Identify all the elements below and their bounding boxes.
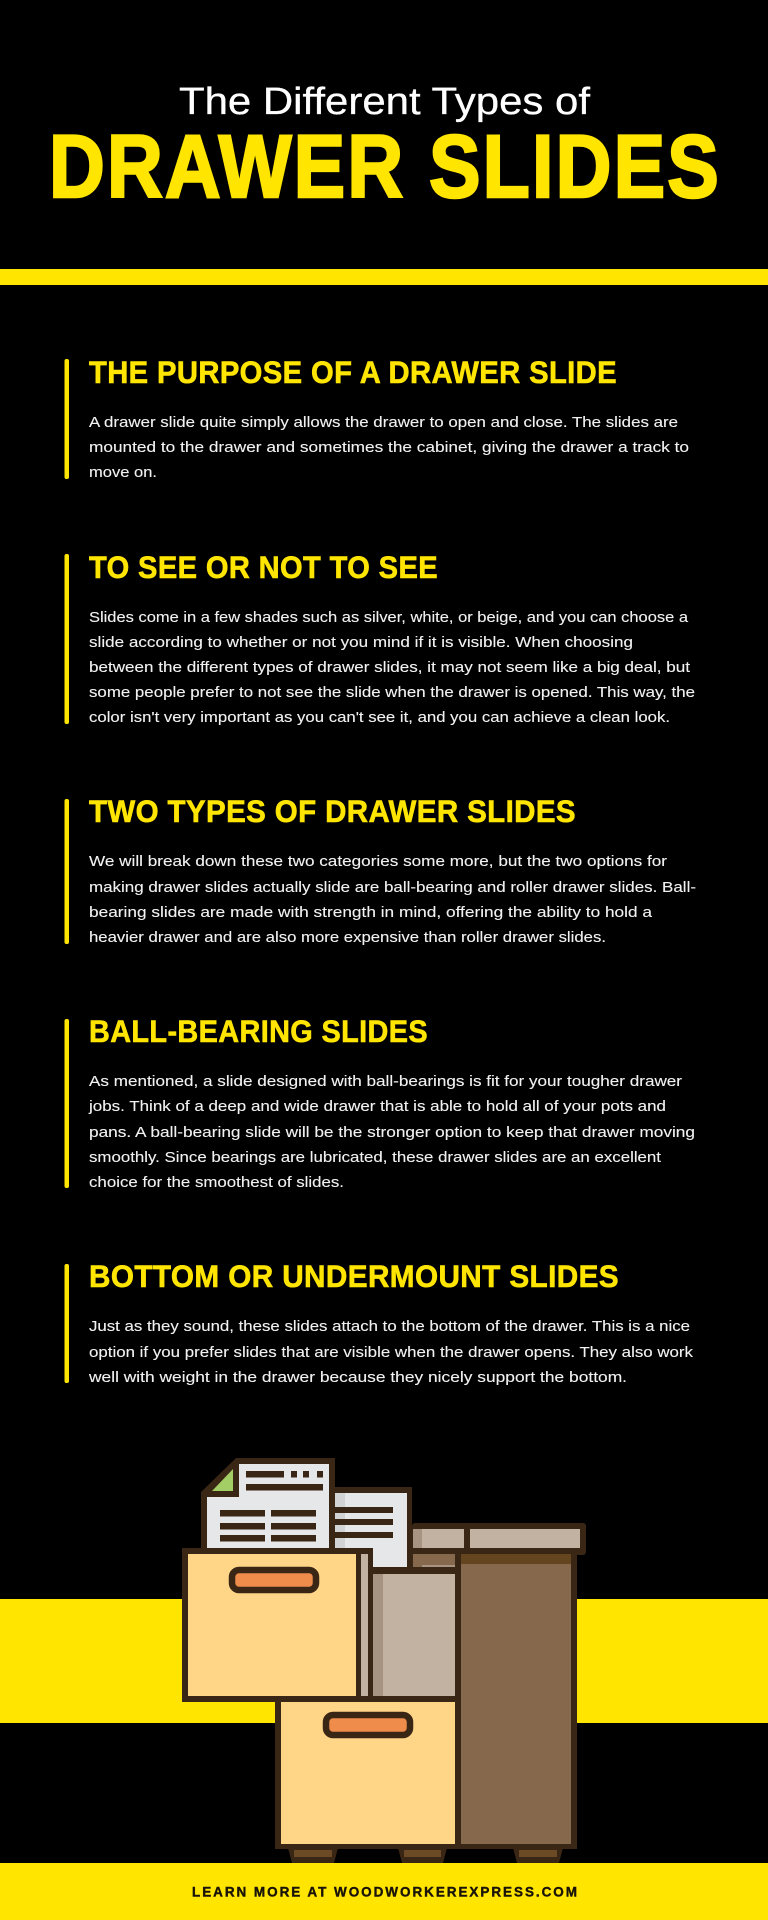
title: The Different Types of bbox=[179, 81, 590, 123]
body text: slide according to whether or not you mind if it is visible. When choosing bbox=[89, 634, 633, 651]
heading: BOTTOM OR UNDERMOUNT SLIDES bbox=[89, 1258, 619, 1294]
body text: A drawer slide quite simply allows the drawer to open and close. The slides are bbox=[89, 414, 678, 431]
icon: filing cabinet with papers bbox=[182, 1458, 586, 1863]
body text bbox=[88, 1318, 694, 1386]
body text: smoothly. Since bearings are lubricated, these drawer slides are an excellent bbox=[89, 1149, 662, 1166]
panel: to see or not to see bbox=[64, 549, 695, 726]
panel: two types of drawer slides bbox=[64, 793, 696, 946]
cabinet feet bbox=[288, 1848, 563, 1863]
body text: well with weight in the drawer because they nicely support the bottom. bbox=[88, 1369, 627, 1386]
upper open drawer bbox=[182, 1548, 373, 1702]
accent bar bbox=[64, 1019, 69, 1188]
footer text: LEARN MORE AT WOODWORKEREXPRESS.COM bbox=[192, 1884, 577, 1900]
cabinet side panel bbox=[455, 1548, 577, 1849]
body text: bearing slides are made with strength in mind, offering the ability to hold a bbox=[89, 904, 653, 921]
header divider band bbox=[0, 269, 768, 285]
footer band bbox=[0, 1863, 768, 1920]
body text: pans. A ball-bearing slide will be the stronger option to keep that drawer moving bbox=[89, 1124, 695, 1141]
accent bar bbox=[64, 799, 69, 944]
heading: TWO TYPES OF DRAWER SLIDES bbox=[89, 793, 576, 829]
yellow background band behind illustration bbox=[0, 1599, 768, 1723]
body text bbox=[88, 1073, 695, 1191]
heading: BALL-BEARING SLIDES bbox=[89, 1013, 428, 1049]
body text: between the different types of drawer slides, it may not seem like a big deal, but bbox=[89, 659, 691, 676]
lower drawer bbox=[275, 1696, 461, 1849]
body text bbox=[89, 414, 689, 481]
body text: move on. bbox=[89, 464, 157, 481]
back paper bbox=[330, 1487, 412, 1574]
accent bar bbox=[64, 359, 69, 479]
body text: choice for the smoothest of slides. bbox=[89, 1174, 344, 1191]
body text: Just as they sound, these slides attach to the bottom of the drawer. This is a nice bbox=[89, 1318, 690, 1335]
body text: color isn't very important as you can't see it, and you can achieve a clean look. bbox=[89, 709, 670, 726]
accent bar bbox=[64, 1264, 69, 1383]
accent bar bbox=[64, 554, 69, 724]
heading: THE PURPOSE OF A DRAWER SLIDE bbox=[89, 354, 617, 390]
cabinet interior slot bbox=[368, 1548, 461, 1702]
body text: We will break down these two categories some more, but the two options for bbox=[89, 853, 667, 870]
body text: option if you prefer slides that are visible when the drawer opens. They also work bbox=[89, 1344, 694, 1361]
body text bbox=[89, 609, 695, 726]
cabinet top bbox=[412, 1523, 586, 1555]
body text: jobs. Think of a deep and wide drawer that is able to hold all of your pots and bbox=[88, 1098, 666, 1115]
body text: As mentioned, a slide designed with ball-bearings is fit for your tougher drawer bbox=[89, 1073, 682, 1090]
body text: Slides come in a few shades such as silver, white, or beige, and you can choose a bbox=[89, 609, 689, 626]
panel: bottom or undermount slides bbox=[64, 1258, 694, 1386]
panel: ball-bearing slides bbox=[64, 1013, 695, 1191]
body text: mounted to the drawer and sometimes the cabinet, giving the drawer a track to bbox=[89, 439, 689, 456]
body text: heavier drawer and are also more expensive than roller drawer slides. bbox=[89, 929, 606, 946]
heading: TO SEE OR NOT TO SEE bbox=[89, 549, 438, 585]
panel: the purpose of a drawer slide bbox=[64, 354, 689, 481]
front paper bbox=[201, 1458, 335, 1548]
body text bbox=[89, 853, 696, 946]
body text: making drawer slides actually slide are ball-bearing and roller drawer slides. Ball- bbox=[89, 879, 696, 896]
body text: some people prefer to not see the slide when the drawer is opened. This way, the bbox=[89, 684, 695, 701]
